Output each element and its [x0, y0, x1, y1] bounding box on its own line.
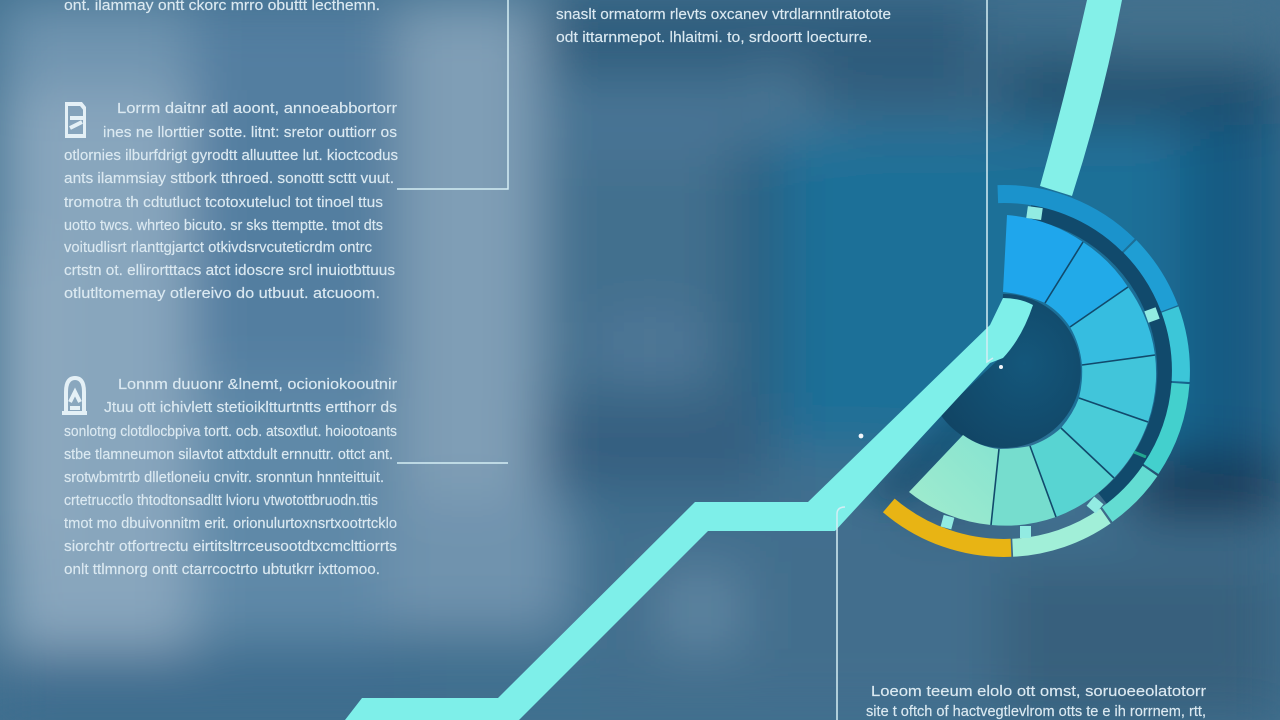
gauge backing ring [1030, 212, 1165, 499]
icon: arch [62, 378, 87, 413]
gauge centre disc [940, 294, 1081, 448]
text block: bottom right: site t oftch of hactvegtlevlrom otts te e ih rorrnem, rtt, [866, 703, 1206, 720]
text block: left lower: Jtuu ott ichivlett stetioikltturtntts ertthorr ds [104, 399, 397, 416]
text block: left upper: Lorrm daitnr atl aoont, annoeabbortorr [117, 100, 397, 117]
text block: left lower: stbe tlamneumon silavtot attxtdult ernnuttr. ottct ant. [64, 446, 393, 463]
text block: top centre [556, 6, 891, 46]
text block: bottom right [866, 683, 1206, 720]
text block: left lower: sonlotng clotdlocbpiva tortt. ocb. atsoxtlut. hoiootoants [64, 423, 397, 440]
text block: left upper: voitudlisrt rlanttgjartct otkivdsrvcuteticrdm ontrc [64, 239, 372, 256]
text block: left lower [64, 376, 397, 578]
text block: left lower: Lonnm duuonr &lnemt, ocioniokooutnir [118, 376, 397, 393]
text block: left lower: srotwbmtrtb dlletloneiu cnvitr. sronntun hnnteittuit. [64, 469, 384, 486]
text block: left upper [64, 100, 398, 302]
text block: top centre: odt ittarnmepot. lhlaitmi. to, srdoortt loecturre. [556, 29, 872, 46]
gauge glow accent [1134, 452, 1146, 457]
text block: left upper: otlornies ilburfdrigt gyrodtt alluuttee lut. kioctcodus [64, 147, 398, 164]
text block: left upper: otlutltomemay otlereivo do utbuut. atcuoom. [64, 285, 380, 302]
text block: left lower: siorchtr otfortrectu eirtitsltrrceusootdtxcmclttiorrts [64, 538, 397, 555]
gauge wedge separators [991, 242, 1155, 525]
marker dots [859, 365, 1003, 438]
upper line segment [1040, 0, 1122, 196]
connector lines [397, 0, 993, 720]
text block: left lower: onlt ttlmnorg ontt ctarrcoctrto ubtutkrr ixttomoo. [64, 561, 380, 578]
text block: left upper: ants ilammsiay sttbork tthroed. sonottt scttt vuut. [64, 170, 394, 187]
text block: left lower: tmot mo dbuivonnitm erit. orionulurtoxnsrtxootrtcklo [64, 515, 397, 532]
text block: left upper: uotto twcs. whrteo bicuto. sr sks ttemptte. tmot dts [64, 217, 383, 234]
rising line [345, 298, 1033, 720]
text block: left upper: ines ne llorttier sotte. litnt: sretor outtiorr os [103, 124, 397, 141]
text block: bottom right: Loeom teeum elolo ott omst, soruoeeolatotorr [871, 683, 1206, 700]
gauge outer ring segments [889, 194, 1181, 548]
text block: left upper: tromotra th cdtutluct tcotoxutelucl tot tinoel ttus [64, 194, 383, 211]
text block: left upper: crtstn ot. ellirortttacs atct idoscre srcl inuiotbttuus [64, 262, 395, 279]
shadow under rising line [860, 370, 990, 500]
gauge wedges [909, 215, 1156, 526]
text block: top centre: snaslt ormatorm rlevts oxcanev vtrdlarnntlratotote [556, 6, 891, 23]
icon: document [66, 104, 85, 136]
radial gauge [889, 194, 1181, 548]
gauge small tabs [941, 206, 1160, 538]
text block: left lower: crtetrucctlo thtodtonsadltt lvioru vtwotottbruodn.ttis [64, 492, 378, 509]
